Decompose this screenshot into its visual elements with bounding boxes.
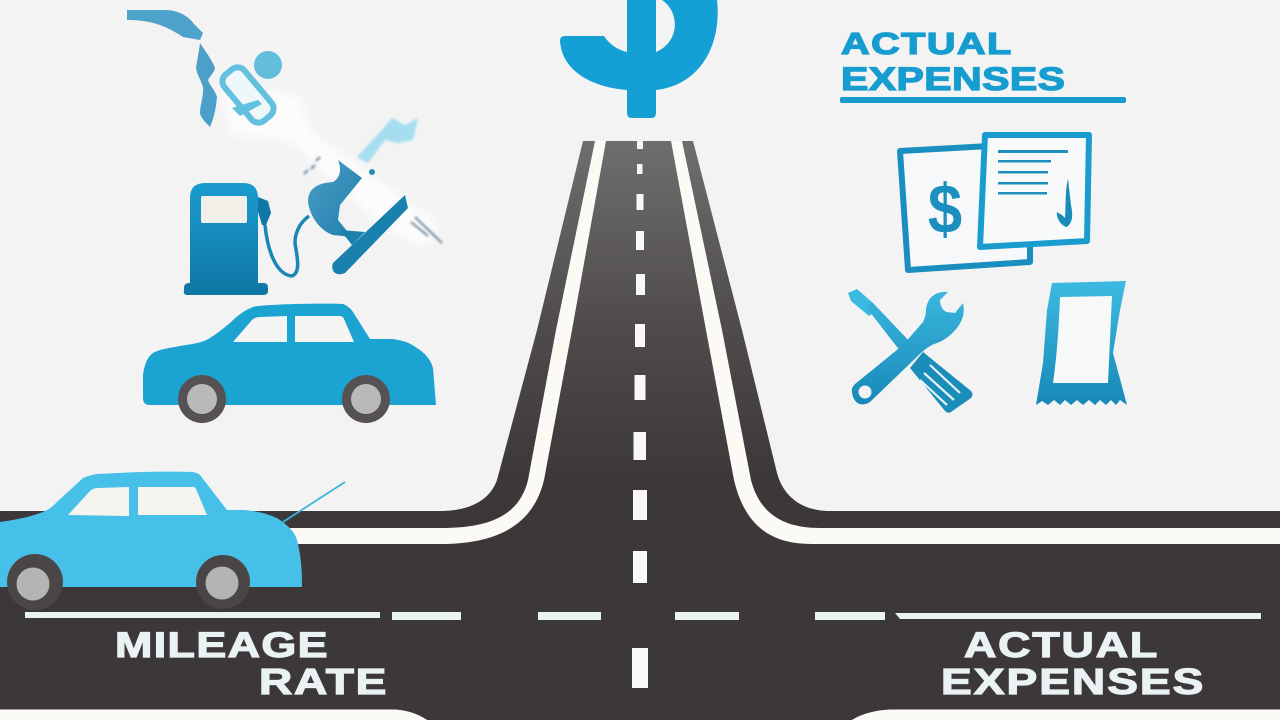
car windows (68, 487, 207, 516)
front document (980, 135, 1089, 247)
road label: actual expenses (941, 626, 1203, 702)
heading: actual expenses: ACTUAL (841, 26, 1011, 61)
heading: actual expenses (840, 26, 1126, 103)
screwdriver shaft (866, 302, 912, 352)
dollar sign (560, 0, 718, 118)
check mark (1057, 179, 1072, 227)
bottom road edge (0, 710, 1280, 720)
pump body (184, 183, 268, 295)
icon: blue car (143, 304, 436, 423)
pump screen (201, 196, 247, 223)
screwdriver grooves (920, 365, 960, 405)
icon: fuel nozzle illustration (127, 10, 442, 274)
icon: wrench and screwdriver (848, 289, 972, 413)
car body (143, 304, 436, 405)
left road edge line (0, 141, 606, 544)
drip (369, 169, 375, 175)
pump handle (258, 197, 271, 225)
screwdriver handle (910, 352, 972, 413)
car wheels (178, 375, 390, 423)
car body (0, 472, 302, 587)
small marks (304, 157, 442, 243)
horizontal lane line (25, 612, 1261, 620)
hose ribbon (196, 43, 217, 127)
road label: mileage rate: RATE (259, 662, 386, 702)
icon: fuel pump (184, 183, 309, 295)
icon: documents (900, 135, 1089, 270)
car windows (233, 316, 354, 342)
icon: receipt (1036, 281, 1127, 405)
pump hose (265, 216, 309, 276)
heading underline (840, 97, 1126, 103)
nozzle body (308, 160, 362, 237)
centre dashed line (632, 141, 648, 688)
road label: mileage rate (115, 626, 386, 702)
screwdriver head (848, 289, 875, 316)
wrench hole (858, 386, 872, 398)
right road edge line (671, 141, 1280, 544)
heading: actual expenses: EXPENSES (841, 61, 1065, 97)
antenna (283, 482, 345, 522)
road label: actual expenses: ACTUAL (964, 626, 1157, 665)
road label: mileage rate: MILEAGE (115, 626, 327, 665)
document text lines (998, 150, 1068, 194)
nozzle lever (332, 195, 408, 274)
road label: actual expenses: EXPENSES (941, 662, 1203, 702)
icon: light blue car on road (0, 472, 345, 610)
vapour (357, 118, 418, 163)
receipt inner panel (1053, 296, 1112, 383)
white glow (222, 85, 440, 250)
ring (219, 64, 277, 126)
hose top (127, 10, 203, 40)
dollar glyph: $ (928, 169, 962, 248)
receipt outline (1036, 281, 1127, 405)
back document (900, 146, 1030, 270)
car wheels (7, 554, 250, 610)
ball (254, 51, 282, 79)
wrench (852, 292, 964, 404)
